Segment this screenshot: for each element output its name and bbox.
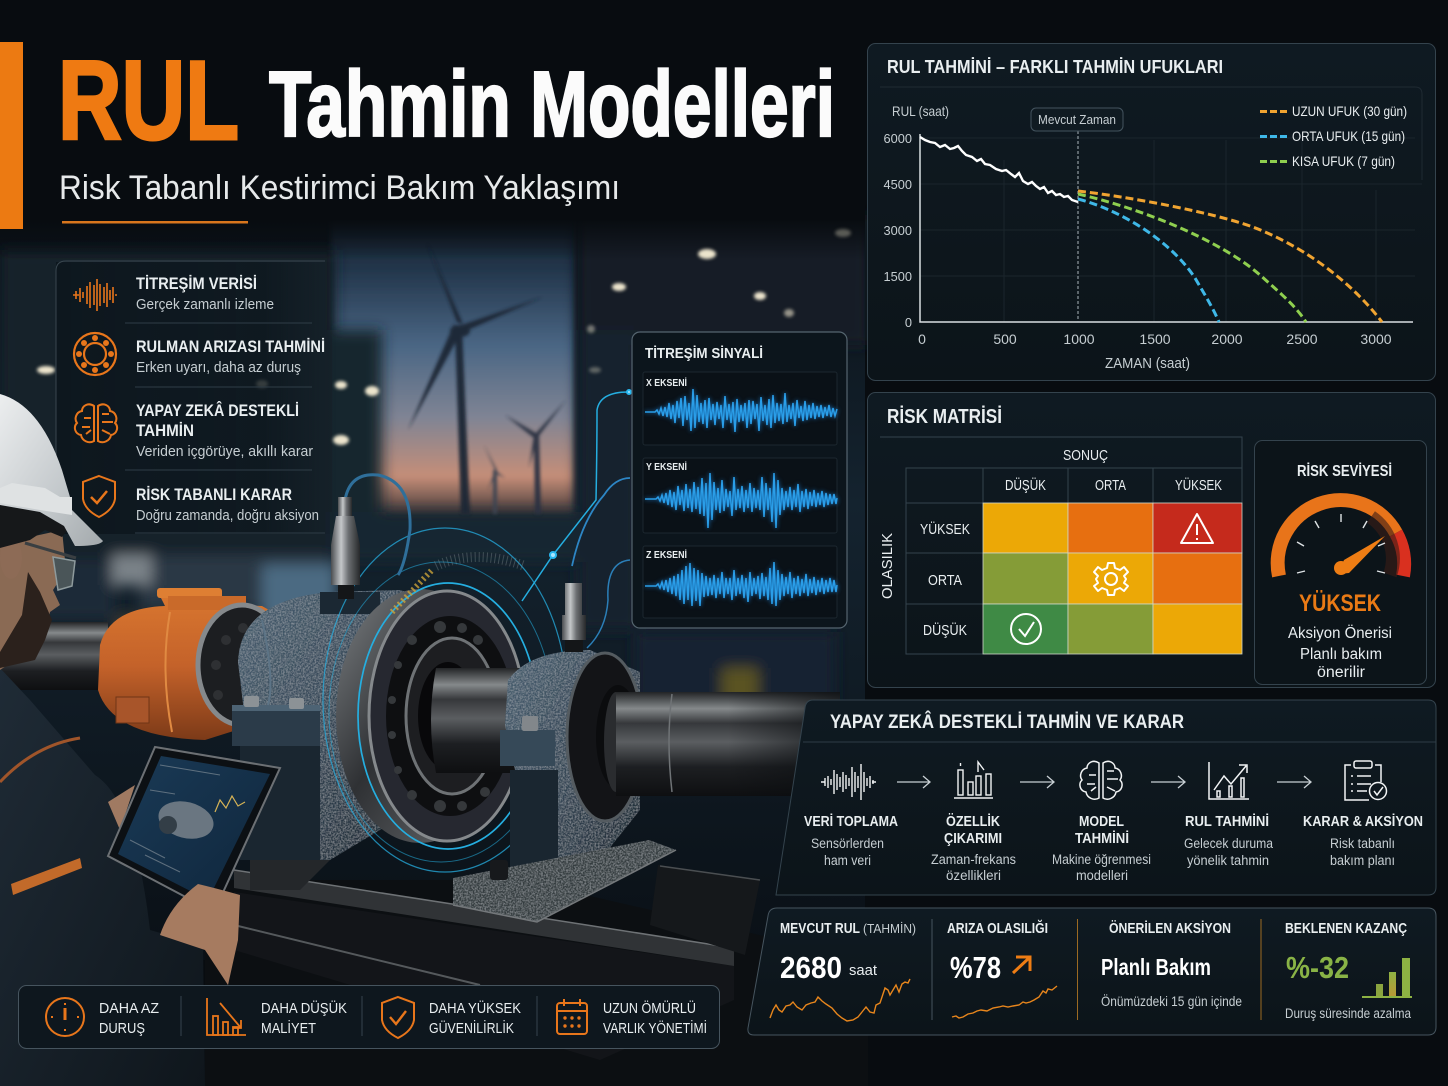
helmet dark band and hair [0,505,70,548]
x ticks [918,331,1392,347]
step: RUL prediction [1184,762,1273,868]
short horizon curve [1078,194,1306,322]
step: decision and action [1303,761,1423,868]
middle shaft [431,668,520,773]
item: bearing fault: RULMAN ARIZASI TAHMİNİ [136,337,325,356]
recommended action: önerilir [1317,664,1365,681]
historic RUL line [920,137,1078,202]
column headers: ORTA [1095,478,1126,494]
KPI: recommended action: Önümüzdeki 15 gün içinde [1101,992,1242,1009]
step: data collection [804,764,898,868]
heading: TİTREŞİM SİNYALİ [645,345,763,362]
row headers: DÜŞÜK [923,621,967,639]
icon: check [1011,614,1041,644]
engineer [0,394,205,1086]
benefit: higher reliability: GÜVENİLİRLİK [429,1019,514,1037]
step: data collection: VERİ TOPLAMA [804,813,898,830]
tablet and hands [108,747,280,985]
orange side bar [0,42,23,229]
beard [0,572,52,668]
benefit: less downtime [46,998,159,1037]
benefit: less downtime: DAHA AZ [99,1001,159,1017]
panel: AI prediction flow [776,700,1436,895]
risk level value: YÜKSEK [1299,590,1382,617]
row headers: YÜKSEK [920,520,970,538]
step: model prediction: Makine öğrenmesi [1052,852,1151,867]
icon: gear [1094,563,1128,595]
recommended action: Aksiyon Önerisi [1288,624,1392,642]
step: feature extraction: özellikleri [946,868,1001,883]
KPI: current RUL: MEVCUT RUL [780,921,860,937]
gauge heading: RİSK SEVİYESİ [1297,463,1392,480]
current time marker [1077,131,1079,322]
heading: YAPAY ZEKÂ DESTEKLİ TAHMİN VE KARAR [830,711,1184,733]
item: risk based decision: RİSK TABANLI KARAR [136,485,292,504]
gauge [1278,500,1404,576]
helmet band [0,483,72,515]
KPI: recommended action: ÖNERİLEN AKSİYON [1109,920,1231,937]
helmet [0,394,103,546]
item: risk based decision [83,476,319,524]
y ticks: 6000 [884,131,912,146]
y ticks [884,131,912,330]
legend: UZUN UFUK (30 gün) [1292,103,1407,119]
step: feature extraction [931,762,1016,883]
panel: benefits strip [18,986,720,1048]
item: risk based decision: Doğru zamanda, doğru aksiyon [136,507,319,524]
sensors and cables [331,475,630,652]
wind turbines [408,243,566,514]
chart: Z axis [643,546,837,618]
current time tag [1031,108,1123,131]
jacket [0,668,205,1086]
column headers: YÜKSEK [1175,476,1222,494]
panel: risk level gauge [1254,440,1426,684]
step: RUL prediction: RUL TAHMİNİ [1185,813,1269,830]
KPI: current RUL [770,921,916,1021]
holographic arcs [323,528,567,872]
legend: KISA UFUK (7 gün) [1292,153,1395,169]
step: decision and action: bakım planı [1330,853,1395,868]
face [0,530,66,670]
long horizon curve [1078,191,1382,322]
bearing housing right [453,650,676,922]
right shaft [604,692,840,796]
item: vibration data [73,274,274,313]
chart: Z axis: Z EKSENİ [646,548,687,561]
KPI: failure probability: ARIZA OLASILIĞI [947,919,1048,937]
KPI: current RUL: saat [849,962,878,979]
benefit: long life assets [557,999,707,1037]
KPI: expected gain: Duruş süresinde azalma [1285,1005,1411,1021]
mid horizon curve [1078,199,1219,322]
benefit: lower cost [207,998,347,1037]
chart: Y axis [643,458,837,533]
step: model prediction: modelleri [1076,868,1128,883]
matrix axis: probability: OLASILIK [880,533,896,599]
x ticks: 2500 [1286,331,1318,347]
column headers [906,468,1242,503]
heading: RİSK MATRİSİ [887,405,1002,428]
bearing housing left [232,590,430,890]
row headers [906,520,983,639]
ear [0,537,22,579]
y ticks: 1500 [884,269,912,284]
KPI: expected gain [1285,921,1412,1021]
panel: vibration signal [632,332,847,628]
y-axis label: RUL (saat) [892,103,949,119]
benefit: higher reliability [382,997,521,1038]
panel: KPI strip [748,908,1436,1035]
KPI: failure probability: %78 [950,950,1001,985]
item: bearing fault [74,333,325,376]
benefit: lower cost: DAHA DÜŞÜK [261,999,347,1017]
item: AI prediction: TAHMİN [136,421,194,440]
base frame [205,865,868,1086]
step: RUL prediction: Gelecek duruma [1184,836,1273,851]
orange underline [62,221,248,224]
motor and left shaft [0,588,290,740]
item: AI prediction [75,401,313,460]
KPI: expected gain: %-32 [1286,950,1349,985]
matrix axis: consequence: SONUÇ [1063,448,1108,464]
step: data collection: ham veri [824,853,871,868]
x ticks: 500 [993,331,1017,347]
x ticks: 3000 [1360,331,1392,347]
step: model prediction: MODEL [1079,814,1124,830]
chart: Y axis: Y EKSENİ [646,460,687,473]
glasses [25,543,76,590]
matrix frame [880,437,1242,654]
signal lines to vibration panel [522,390,631,648]
column headers: DÜŞÜK [1005,476,1046,494]
KPI: recommended action: Planlı Bakım [1101,954,1211,980]
step: RUL prediction: yönelik tahmin [1187,853,1269,868]
benefit: long life assets: VARLIK YÖNETİMİ [603,1019,707,1037]
benefit: less downtime: DURUŞ [99,1021,145,1037]
benefit: lower cost: MALİYET [261,1019,316,1037]
icon: warning [1181,514,1213,543]
bar chart [1362,958,1412,998]
row headers: ORTA [928,573,962,589]
benefit: higher reliability: DAHA YÜKSEK [429,999,521,1017]
x-axis label: ZAMAN (saat) [1105,356,1190,372]
item: AI prediction: YAPAY ZEKÂ DESTEKLİ [136,401,299,420]
jacket orange piping [0,738,80,782]
step: feature extraction: Zaman-frekans [931,852,1016,867]
benefit: long life assets: UZUN ÖMÜRLÜ [603,999,696,1017]
x ticks: 1500 [1139,331,1171,347]
KPI: current RUL: 2680 [780,950,842,985]
panel: RUL chart [868,44,1436,380]
KPI: current RUL: (TAHMİN) [863,922,916,936]
KPI: recommended action [1101,920,1242,1009]
x ticks: 0 [918,331,926,347]
step: data collection: Sensörlerden [811,836,884,851]
title [58,38,835,163]
y ticks: 0 [905,315,912,330]
heading: RUL TAHMİNİ – FARKLI TAHMİN UFUKLARI [887,56,1223,77]
item: bearing fault: Erken uyarı, daha az duruş [136,359,301,376]
step: model prediction: TAHMİNİ [1075,830,1129,847]
axes [920,134,1413,322]
step: feature extraction: ÖZELLİK [946,813,1000,830]
current time tag: Mevcut Zaman [1038,112,1116,127]
KPI: failure probability [947,919,1057,1018]
item: AI prediction: Veriden içgörüye, akıllı karar [136,443,313,460]
chart: X axis [643,372,837,445]
y ticks: 4500 [884,177,912,192]
item: vibration data: Gerçek zamanlı izleme [136,296,274,313]
legend: ORTA UFUK (15 gün) [1292,128,1405,144]
arrows [897,776,1311,788]
legend [1260,103,1407,169]
step: model prediction [1052,761,1151,883]
step: decision and action: Risk tabanlı [1330,836,1395,851]
recommended action: Planlı bakım [1300,646,1382,663]
x ticks: 1000 [1063,331,1095,347]
title: Tahmin Modelleri [269,52,835,156]
y ticks: 3000 [884,223,912,238]
x ticks: 2000 [1211,331,1243,347]
step: feature extraction: ÇIKARIMI [944,831,1002,847]
line chart [884,103,1422,372]
recommended action [1288,624,1392,681]
subtitle: Risk Tabanlı Kestirimci Bakım Yaklaşımı [59,169,620,207]
KPI: expected gain: BEKLENEN KAZANÇ [1285,921,1407,937]
matrix cells [983,503,1242,654]
sleeve patch [11,858,82,895]
panel: key points list [56,261,336,535]
title: RUL [58,38,239,163]
item: vibration data: TİTREŞİM VERİSİ [136,274,257,293]
large bearing [336,589,525,843]
panel: risk matrix [868,392,1436,688]
chart: X axis: X EKSENİ [646,376,687,389]
step: decision and action: KARAR & AKSİYON [1303,813,1423,830]
